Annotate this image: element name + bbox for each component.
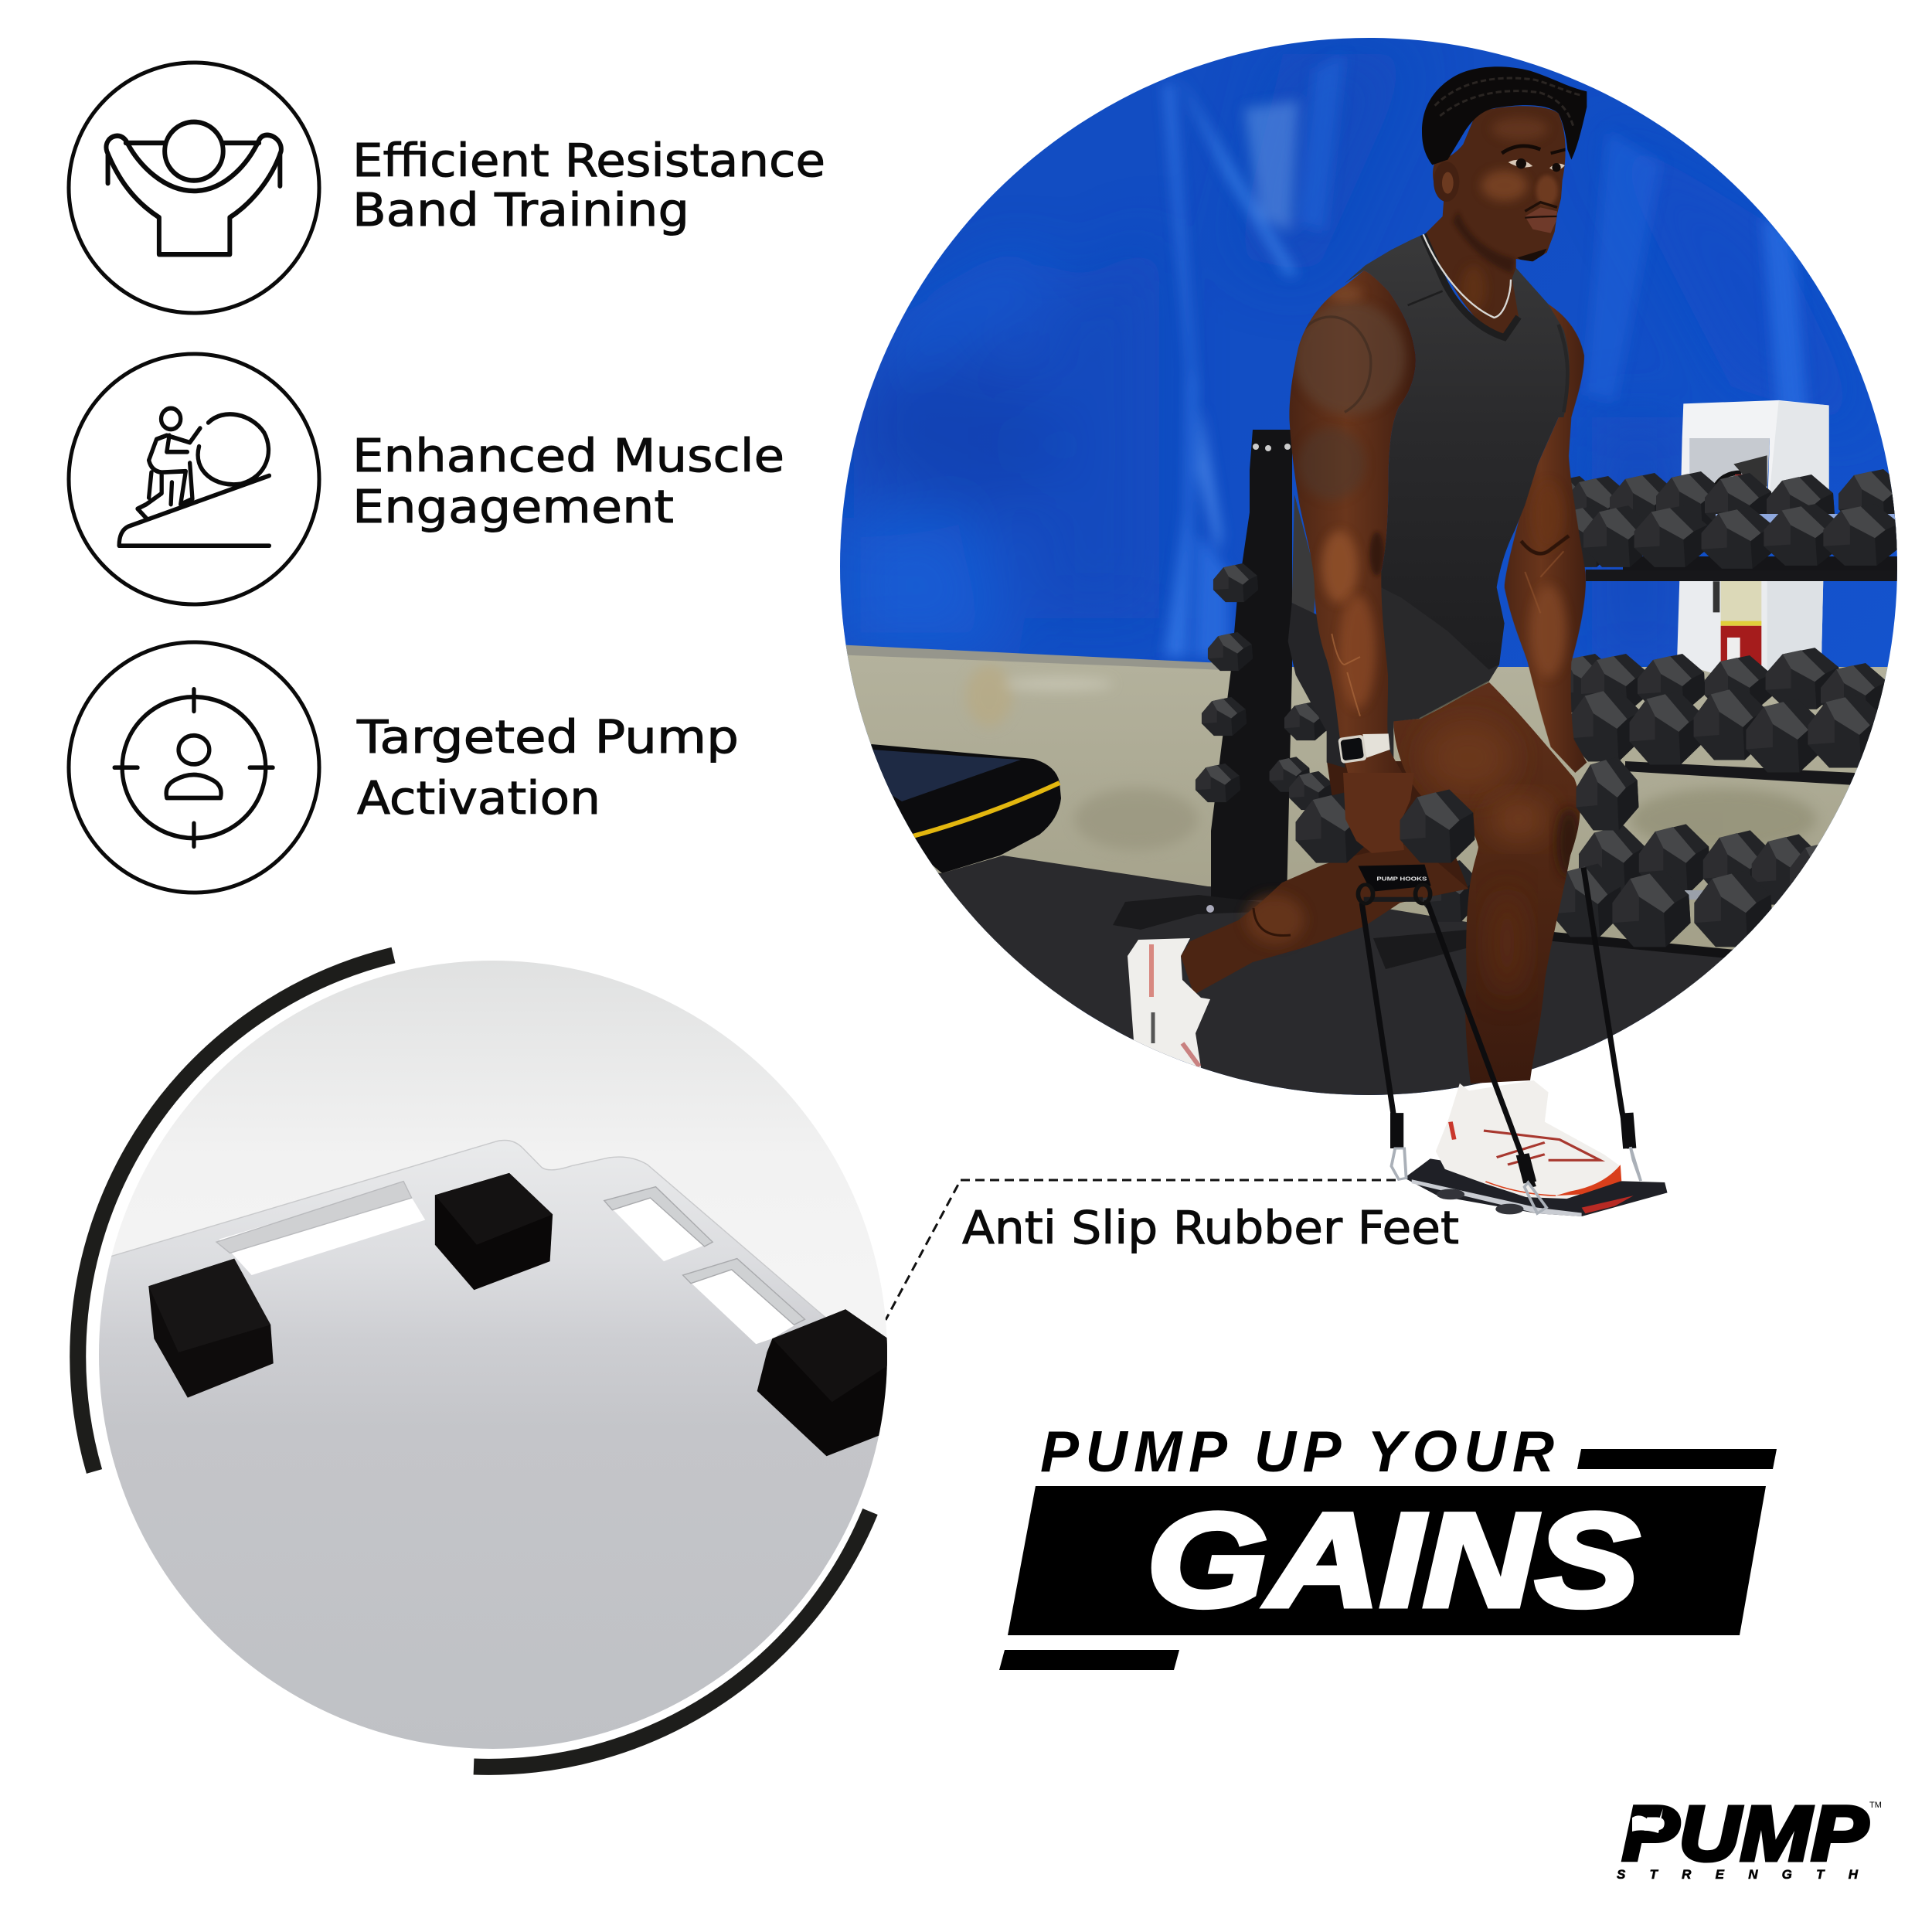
text: enhanced muscle engagement: Enhanced Muscle bbox=[352, 429, 784, 482]
ear bbox=[1434, 162, 1459, 202]
band handle with label: PUMP HOOKS bbox=[1376, 876, 1427, 882]
floor bbox=[938, 855, 1727, 1095]
front arm bbox=[1288, 268, 1417, 796]
front thigh and calf bbox=[1393, 682, 1580, 1083]
watch bbox=[1338, 733, 1390, 764]
text: efficient resistance band training: Efficient Resistance bbox=[352, 134, 825, 187]
photo panel: athlete lunge with dumbbells bbox=[835, 38, 1906, 1216]
held dumbbell: right head bbox=[1400, 790, 1475, 862]
rear leg and shoe bbox=[1128, 761, 1468, 1082]
text: enhanced muscle engagement: Engagement bbox=[352, 480, 674, 533]
tank top bbox=[1345, 234, 1570, 670]
text: targeted pump activation: Targeted Pump bbox=[356, 710, 739, 764]
foot plate bbox=[1404, 1158, 1668, 1216]
banner: gains bbox=[1008, 1486, 1766, 1635]
top shelf dumbbells bbox=[1570, 469, 1897, 581]
rear arm bbox=[1504, 304, 1587, 773]
banner: gains: GAINS bbox=[1147, 1486, 1639, 1634]
logo: pump strength: TM bbox=[1869, 1801, 1882, 1810]
rubber foot left bbox=[148, 1259, 274, 1398]
plate cutouts bbox=[216, 1182, 804, 1344]
heading: pump up your: PUMP UP YOUR bbox=[1040, 1419, 1554, 1484]
photo background: blue tarp, wall and gym racks bbox=[835, 38, 1906, 1121]
callout text: anti slip rubber feet: Anti Slip Rubber Feet bbox=[962, 1201, 1459, 1254]
cabinet and fire extinguisher bbox=[1677, 400, 1829, 690]
logo: pump strength: STRENGTH bbox=[1617, 1867, 1859, 1882]
decorative arc: lower right bbox=[474, 1512, 870, 1767]
bottom row dumbbells bbox=[1552, 824, 1818, 958]
text: efficient resistance band training bbox=[352, 134, 825, 236]
panel: rubber feet close-up bbox=[83, 961, 908, 1767]
bench bbox=[850, 744, 1061, 873]
icon: target person bbox=[69, 642, 319, 893]
decorative arc: upper left bbox=[78, 955, 393, 1471]
text: efficient resistance band training: Band Training bbox=[352, 183, 689, 236]
middle shelf dumbbells bbox=[1550, 648, 1889, 785]
front shoe bbox=[1436, 1080, 1621, 1199]
accent bar: top right bbox=[1577, 1449, 1777, 1469]
athlete figure bbox=[1288, 66, 1668, 1216]
shorts front bbox=[1381, 572, 1499, 760]
held dumbbell: left head bbox=[1296, 792, 1370, 863]
band handle with label bbox=[1358, 865, 1431, 903]
rubber foot right bbox=[757, 1309, 908, 1456]
accent bar: bottom left bbox=[999, 1650, 1179, 1670]
icon: band training bbox=[69, 63, 319, 313]
shorts back and lower tank bbox=[1288, 495, 1345, 767]
left dumbbell rack bbox=[1113, 430, 1479, 969]
hair bbox=[1422, 66, 1587, 165]
concrete wall bbox=[835, 649, 1901, 1005]
text: enhanced muscle engagement bbox=[352, 429, 784, 533]
callout: dashed leader line bbox=[886, 1180, 1396, 1320]
logo: pump strength: PUMP bbox=[1622, 1791, 1868, 1877]
held dumbbell: second hand bbox=[1577, 757, 1638, 830]
hand bbox=[1343, 773, 1414, 853]
rubber foot middle bbox=[435, 1173, 553, 1290]
text: targeted pump activation bbox=[356, 710, 739, 825]
text: targeted pump activation: Activation bbox=[357, 771, 600, 825]
icon: pushing boulder uphill bbox=[69, 354, 319, 604]
metal plate bbox=[83, 1141, 908, 1767]
neck and head bbox=[1425, 106, 1566, 334]
resistance bands bbox=[1362, 867, 1641, 1213]
necklace bbox=[1423, 234, 1511, 318]
